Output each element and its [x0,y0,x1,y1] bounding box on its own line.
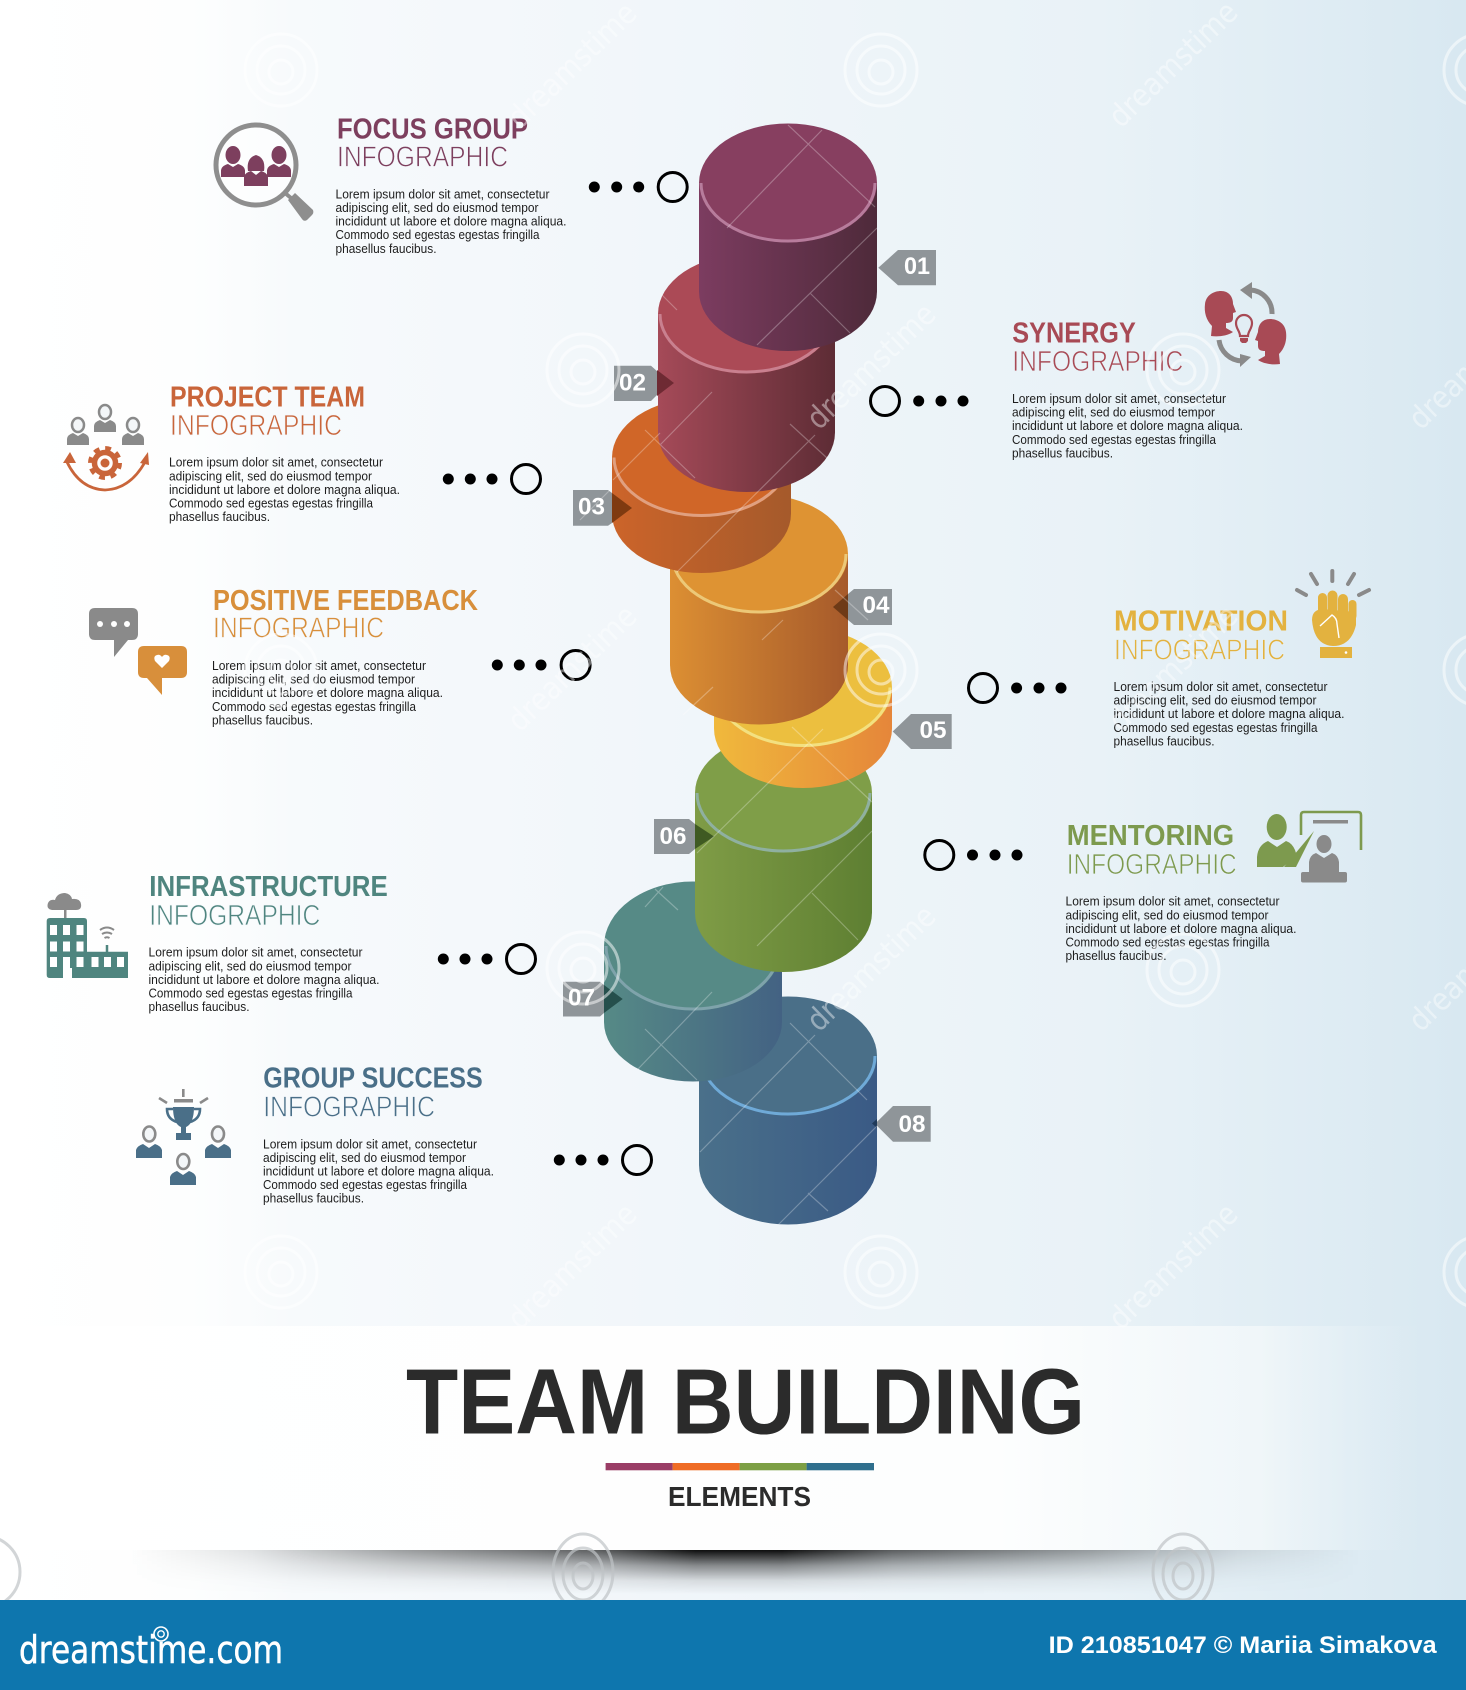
body text: incididunt ut labore et dolore magna aliqua. [263,1164,494,1178]
body text: phasellus faucibus. [1012,445,1113,460]
body text: Lorem ipsum dolor sit amet, consectetur [212,658,427,673]
badge 07 [563,982,623,1016]
body text: incididunt ut labore et dolore magna aliqua. [148,972,380,987]
title panel [171,1326,1319,1590]
icon: trophy and team [136,1089,231,1185]
body text: Lorem ipsum dolor sit amet, consectetur [263,1136,478,1151]
connector: group success [554,1146,652,1174]
watermark text: dreamstime [1102,598,1245,739]
connector: motivation [968,674,1066,702]
body text: adipiscing elit, sed do eiusmod tempor [263,1150,467,1165]
body text: incididunt ut labore et dolore magna aliqua. [336,214,566,229]
block: positive feedback [89,585,478,727]
body text: adipiscing elit, sed do eiusmod tempor [1114,693,1317,708]
cylinder 05 [714,628,892,788]
body text: incididunt ut labore et dolore magna aliqua. [212,685,443,700]
connector: positive feedback [492,650,590,680]
watermark text: dreamstime [800,296,943,437]
connector: focus group [589,172,687,202]
heading: mentoring: MENTORING [1067,820,1234,852]
watermark text: dreamstime [1102,1196,1245,1337]
icon: building with cloud [47,893,128,978]
body text [169,455,400,524]
body text: incididunt ut labore et dolore magna aliqua. [1114,706,1344,721]
cylinder 07 [604,882,782,1082]
body text: incididunt ut labore et dolore magna aliqua. [1066,921,1296,936]
subheading: INFOGRAPHIC [1012,346,1183,378]
watermark text: dreamstime [501,598,644,739]
body text: Commodo sed egestas egestas fringilla [1114,720,1318,735]
body text: adipiscing elit, sed do eiusmod tempor [1012,405,1216,420]
body text: adipiscing elit, sed do eiusmod tempor [169,468,373,483]
body text: Commodo sed egestas egestas fringilla [148,986,353,1000]
body text: Commodo sed egestas egestas fringilla [336,227,540,242]
heading: infrastructure: INFRASTRUCTURE [149,871,388,903]
colour rule [606,1463,874,1470]
badge 03: 03 [578,494,605,520]
body text: incididunt ut labore et dolore magna aliqua. [1012,418,1243,433]
badge 06: 06 [660,823,686,850]
icon: magnifier with people [216,125,313,221]
body text: Lorem ipsum dolor sit amet, consectetur [1114,679,1328,694]
block: infrastructure [47,871,388,1014]
watermark text: dreamstime [800,898,943,1039]
subheading: INFOGRAPHIC [170,410,342,442]
body text: Commodo sed egestas egestas fringilla [1012,432,1217,447]
badge 08: 08 [898,1111,926,1138]
subheading: INFOGRAPHIC [337,142,508,174]
number badges [563,250,952,1142]
heading: synergy: SYNERGY [1012,318,1136,350]
block: group success [136,1063,494,1206]
body text: Lorem ipsum dolor sit amet, consectetur [148,945,363,960]
icon: mentor at board [1257,812,1361,882]
body text [336,186,566,256]
connector: synergy [870,386,968,416]
icon: speech bubbles [89,608,187,695]
watermark text [501,0,1466,1337]
watermark text: dreamstime [501,1196,644,1337]
badge 05: 05 [920,717,946,744]
body text: phasellus faucibus. [148,999,250,1014]
stacked cylinders [604,124,892,1224]
block: project team [63,382,400,524]
cylinder 06 [695,734,872,972]
body text: phasellus faucibus. [1114,733,1214,748]
badge 03 [573,490,632,526]
body text: incididunt ut labore et dolore magna aliqua. [169,482,400,497]
body text: phasellus faucibus. [212,712,313,727]
subheading: INFOGRAPHIC [263,1092,435,1124]
body text: Lorem ipsum dolor sit amet, consectetur [1012,391,1227,406]
connector: mentoring [925,840,1022,870]
cylinder 02 [658,254,835,492]
body text: phasellus faucibus. [336,241,436,256]
footer logo: dreamstime.com [19,1628,283,1672]
body text: adipiscing elit, sed do eiusmod tempor [212,672,416,687]
badge 01: 01 [904,253,930,280]
body text: Commodo sed egestas egestas fringilla [1066,934,1270,950]
body text: adipiscing elit, sed do eiusmod tempor [1066,907,1269,922]
badge 02: 02 [619,370,646,396]
block: mentoring [1066,812,1361,963]
body text: Commodo sed egestas egestas fringilla [263,1177,468,1192]
heading: motivation: MOTIVATION [1114,606,1288,638]
body text: adipiscing elit, sed do eiusmod tempor [336,200,539,215]
cylinder 03 [612,398,791,573]
heading: project team: PROJECT TEAM [170,382,365,414]
badge 08 [872,1106,931,1142]
body text [148,945,380,1014]
block: synergy [1012,282,1286,460]
cylinder 08 [699,996,877,1224]
cylinder 01 [699,124,877,351]
body text: phasellus faucibus. [1066,948,1166,963]
badge 01 [878,250,936,285]
badge 04: 04 [862,592,890,619]
icon: heads and bulb [1205,282,1286,367]
connector: project team [443,464,540,494]
icon: raised fist [1297,571,1369,658]
title: TEAM BUILDING [406,1350,1085,1454]
body text [263,1136,494,1206]
subheading: INFOGRAPHIC [1114,634,1285,666]
block: motivation [1114,571,1369,748]
subheading: INFOGRAPHIC [213,613,384,645]
body text: adipiscing elit, sed do eiusmod tempor [148,958,352,973]
body text: phasellus faucibus. [263,1191,364,1206]
subheading: INFOGRAPHIC [149,900,320,932]
heading: focus group: FOCUS GROUP [337,113,528,145]
body text: Lorem ipsum dolor sit amet, consectetur [169,455,384,470]
body text: Commodo sed egestas egestas fringilla [212,699,417,714]
heading: positive feedback: POSITIVE FEEDBACK [213,585,478,617]
badge 02 [614,366,674,401]
body text [212,658,443,727]
body text [1012,391,1243,460]
icon: team with gear [63,405,149,490]
footer credit: ID 210851047 © Mariia Simakova [1049,1632,1437,1659]
cylinder 04 [670,494,848,724]
badge 04 [833,589,892,625]
heading: group success: GROUP SUCCESS [263,1063,483,1095]
body text: phasellus faucibus. [169,509,270,524]
body text: Lorem ipsum dolor sit amet, consectetur [1066,894,1280,909]
body text: Commodo sed egestas egestas fringilla [169,496,374,510]
subheading: INFOGRAPHIC [1067,849,1237,881]
panel shadow [171,1550,1319,1590]
body text [1114,679,1344,748]
badge 07: 07 [568,984,595,1012]
footer bar [0,1600,1466,1690]
subtitle: ELEMENTS [668,1481,811,1512]
badge 05 [893,714,952,749]
block: focus group [216,113,566,256]
body text: Lorem ipsum dolor sit amet, consectetur [336,186,550,201]
connector: infrastructure [438,944,536,974]
watermark lines [580,125,877,1225]
badge 06 [654,819,714,854]
body text [1066,894,1296,963]
